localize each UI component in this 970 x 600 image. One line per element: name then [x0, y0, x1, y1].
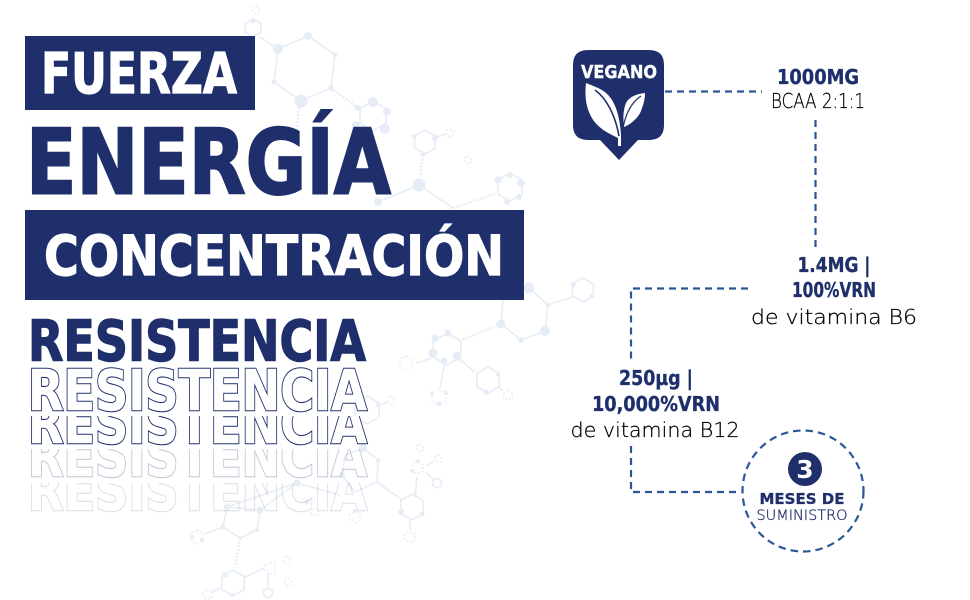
callout: 3 meses de suministro: SUMINISTRO — [756, 508, 848, 524]
callout: 3 meses de suministro: 3 — [796, 455, 814, 484]
outlined RESISTENCIA echoes: RESISTENCIA — [28, 459, 367, 524]
heading: FUERZA: FUERZA — [41, 42, 238, 107]
icon: leaves — [585, 83, 645, 146]
heading: CONCENTRACIÓN — [25, 210, 524, 300]
stat: vitamina B12: 10,000%VRN — [592, 392, 720, 416]
stat: vitamina B6: 100%VRN — [792, 278, 876, 302]
outlined RESISTENCIA echoes: RESISTENCIA — [28, 425, 367, 490]
heading: RESISTENCIA solid: RESISTENCIA — [28, 310, 367, 374]
heading: ENERGÍA: ENERGÍA — [26, 108, 391, 216]
dashed connector lines — [631, 92, 816, 492]
stat: vitamina B6: de vitamina B6 — [751, 305, 917, 329]
stat: vitamina B12 — [570, 366, 740, 442]
outlined RESISTENCIA echoes: RESISTENCIA — [28, 392, 367, 457]
outlined RESISTENCIA echoes: RESISTENCIA — [28, 425, 367, 490]
outlined RESISTENCIA echoes: RESISTENCIA — [28, 359, 367, 424]
stat: vitamina B12: 250µg | — [619, 366, 693, 390]
stat: vitamina B12: de vitamina B12 — [570, 418, 740, 442]
stat: vitamina B6: 1.4MG | — [798, 253, 870, 277]
icon: vegano badge — [573, 50, 664, 160]
outlined RESISTENCIA echoes: RESISTENCIA — [28, 392, 367, 457]
stat: 1000MG BCAA — [771, 65, 865, 113]
outlined RESISTENCIA echoes: RESISTENCIA — [28, 359, 367, 424]
callout: 3 meses de suministro — [742, 430, 864, 552]
stat: vitamina B6 — [751, 253, 917, 329]
stat: 1000MG BCAA: 1000MG — [777, 65, 859, 89]
stat: 1000MG BCAA: BCAA 2:1:1 — [771, 89, 865, 113]
outlined RESISTENCIA echoes: RESISTENCIA — [28, 459, 367, 524]
heading: CONCENTRACIÓN: CONCENTRACIÓN — [44, 224, 504, 288]
outlined RESISTENCIA echoes — [31, 367, 368, 512]
icon: vegano badge: VEGANO — [581, 63, 657, 83]
callout: 3 meses de suministro: MESES DE — [760, 490, 844, 508]
background: molecule pattern — [190, 6, 594, 600]
